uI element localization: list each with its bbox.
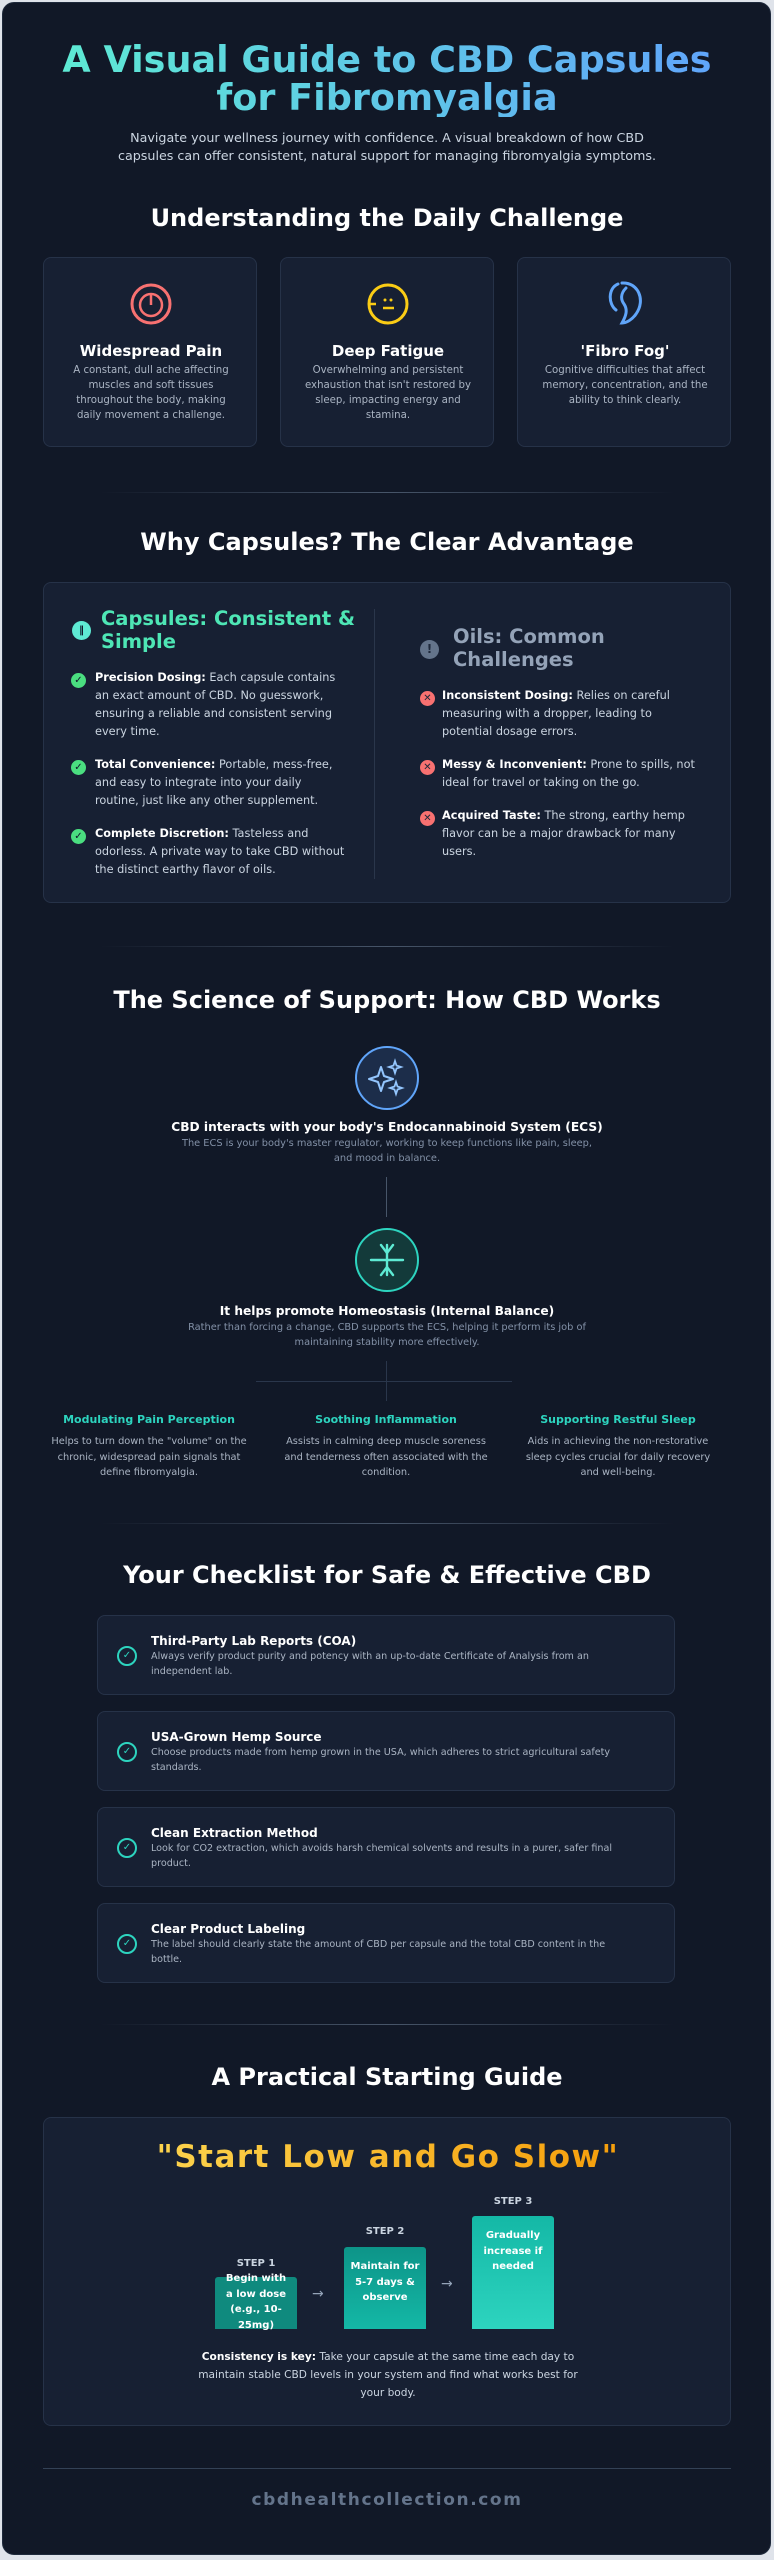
arrow 1: → (312, 2286, 324, 2302)
text: consistency (198, 2351, 578, 2399)
list: oil drawbacks: potential dosage errors. (442, 725, 577, 738)
step 3: needed (492, 2261, 534, 2272)
heading: practical guide: A Practical Starting Guide (211, 2063, 563, 2091)
icon: pain (130, 284, 172, 324)
text: fog: memory, concentration, and the (542, 380, 708, 391)
text: fog (542, 342, 708, 406)
item: messy (420, 760, 435, 775)
text: ECS: The ECS is your body's master regulator, working to keep functions like pain, sleep, (182, 1138, 592, 1149)
icon: check (117, 1838, 137, 1858)
heading: checklist: Your Checklist for Safe & Effective CBD (123, 1561, 651, 1589)
checklist item: extraction: Clean Extraction Method (151, 1826, 318, 1840)
text: homeostasis (188, 1304, 586, 1348)
step 2: 5-7 days & (355, 2276, 415, 2288)
icon: check (117, 1742, 137, 1762)
icon: brain fog (608, 282, 642, 324)
list: capsule benefits: Precision Dosing: Each capsule contains (95, 671, 335, 684)
list: capsule benefits: the distinct earthy flavor of oils. (95, 863, 276, 876)
text: consistency: Consistency is key: Take your capsule at the same time each day to (202, 2351, 574, 2363)
item: taste: ✕ (423, 813, 432, 824)
checklist item: COA: Always verify product purity and potency with an up-to-date Certificate of Analysis from an (151, 1651, 589, 1662)
text: homeostasis: Rather than forcing a change, CBD supports the ECS, helping it perform its job of (188, 1322, 586, 1333)
heading: capsules: Capsules: Consistent & (101, 607, 355, 630)
item: inconsistent (420, 691, 435, 706)
arrow 2: → (441, 2276, 453, 2292)
list: capsule benefits: Total Convenience: Portable, mess-free, (95, 758, 332, 771)
list: capsule benefits: and easy to integrate into your daily (95, 776, 301, 789)
item: inconsistent: ✕ (423, 693, 432, 704)
subtitle (118, 130, 656, 163)
item: convenience: ✓ (74, 762, 83, 773)
list: oil drawbacks: ideal for travel or taking on the go. (442, 776, 640, 789)
column: pain perception: Modulating Pain Perception (63, 1413, 235, 1426)
list: oil drawbacks: measuring with a dropper, leading to (442, 707, 652, 720)
icon: oils warning: ! (427, 642, 432, 656)
item: messy: ✕ (423, 762, 432, 773)
column: pain perception (51, 1413, 247, 1478)
step 3: Gradually (486, 2230, 540, 2241)
column: sleep (526, 1413, 710, 1478)
column: sleep: sleep cycles crucial for daily recovery (526, 1452, 710, 1462)
list: capsule benefits: odorless. A private way to take CBD without (95, 845, 344, 858)
column: pain perception: Helps to turn down the "volume" on the (51, 1436, 247, 1447)
checklist item: labeling: The label should clearly state the amount of CBD per capsule and the total CBD content in the (151, 1939, 605, 1950)
checklist item: extraction: product. (151, 1858, 191, 1869)
text: fog: ability to think clearly. (569, 395, 681, 406)
checklist item: USA hemp: standards. (151, 1762, 202, 1773)
list: capsule benefits: routine, just like any other supplement. (95, 794, 318, 807)
panel: widespread pain (43, 257, 257, 447)
step 2: STEP 2 (366, 2226, 404, 2237)
icon: fatigue face (368, 284, 408, 324)
list: oil drawbacks: Messy & Inconvenient: Prone to spills, not (442, 758, 695, 771)
checklist item: COA: independent lab. (151, 1666, 232, 1677)
icon: check: ✓ (123, 1650, 131, 1661)
panel: start low go slow (43, 2117, 731, 2426)
column: inflammation (284, 1413, 488, 1478)
checklist item: labeling (97, 1903, 675, 1983)
checklist item: COA: Third-Party Lab Reports (COA) (151, 1634, 356, 1648)
list: oil drawbacks: Inconsistent Dosing: Relies on careful (442, 689, 670, 702)
step 2: observe (362, 2292, 408, 2303)
step 3: increase if (484, 2246, 542, 2256)
list: capsule benefits (71, 671, 344, 876)
heading: oils: Oils: Common (453, 625, 605, 648)
heading: capsules (101, 607, 355, 653)
icon: check (117, 1934, 137, 1954)
icon: ECS sparkles (355, 1046, 419, 1110)
column: sleep: Aids in achieving the non-restorative (528, 1436, 708, 1447)
step 2 (344, 2226, 426, 2329)
checklist item: USA hemp (97, 1711, 675, 1791)
list: capsule benefits: ensuring a reliable and consistent serving (95, 707, 332, 720)
subtitle: capsules can offer consistent, natural support for managing fibromyalgia symptoms. (118, 148, 656, 163)
checklist item: labeling: Clear Product Labeling (151, 1922, 305, 1936)
text: fatigue: exhaustion that isn't restored by (305, 380, 471, 391)
step 1 (215, 2258, 297, 2330)
text: ECS: CBD interacts with your body's Endocannabinoid System (ECS) (171, 1120, 603, 1134)
list: oil drawbacks: Acquired Taste: The strong, earthy hemp (442, 809, 685, 822)
icon: check: ✓ (123, 1842, 131, 1853)
text: fatigue: Overwhelming and persistent (313, 365, 463, 376)
title (62, 38, 712, 119)
column: inflammation: and tenderness often associated with the (284, 1452, 488, 1462)
checklist item: labeling: bottle. (151, 1954, 182, 1965)
text: consistency: maintain stable CBD levels in your system and find what works best for (198, 2369, 578, 2381)
text: fatigue: Deep Fatigue (332, 342, 444, 360)
text: fatigue: sleep, impacting energy and (315, 395, 461, 406)
panel: deep fatigue (280, 257, 494, 447)
list: oil drawbacks: users. (442, 845, 476, 858)
item: discretion (71, 829, 86, 844)
title: for Fibromyalgia (216, 76, 558, 119)
heading: science: The Science of Support: How CBD Works (113, 986, 661, 1014)
checklist item: USA hemp: Choose products made from hemp grown in the USA, which adheres to strict agricultural safety (151, 1747, 610, 1758)
text: pain: A constant, dull ache affecting (73, 365, 229, 376)
step 3: STEP 3 (494, 2196, 532, 2207)
column: pain perception: chronic, widespread pain signals that (58, 1452, 240, 1462)
heading: oils: Challenges (453, 648, 574, 671)
item: precision: ✓ (74, 675, 83, 686)
step 1: STEP 1 (237, 2258, 275, 2269)
column: inflammation: Soothing Inflammation (315, 1413, 457, 1426)
checklist item: COA (97, 1615, 675, 1695)
text: fatigue: stamina. (366, 410, 410, 421)
column: sleep: and well-being. (580, 1467, 656, 1478)
text: ECS: and mood in balance. (334, 1153, 440, 1164)
heading: daily challenge: Understanding the Daily Challenge (151, 204, 623, 232)
icon: capsule (72, 621, 91, 640)
column: sleep: Supporting Restful Sleep (540, 1413, 696, 1426)
text: fog: 'Fibro Fog' (581, 342, 669, 360)
icon: check: ✓ (123, 1746, 131, 1757)
item: taste (420, 811, 435, 826)
column: inflammation: condition. (362, 1467, 410, 1478)
footer: cbdhealthcollection.com (251, 2490, 523, 2510)
list: capsule benefits: every time. (95, 725, 160, 738)
list: oil drawbacks: flavor can be a major drawback for many (442, 827, 676, 840)
subtitle: Navigate your wellness journey with confidence. A visual breakdown of how CBD (130, 130, 644, 145)
icon: oils warning (420, 640, 439, 659)
column: pain perception: define fibromyalgia. (100, 1467, 198, 1478)
step 1: (e.g., 10- (230, 2304, 282, 2315)
checklist item: USA hemp: USA-Grown Hemp Source (151, 1730, 322, 1744)
text: fog: Cognitive difficulties that affect (545, 365, 705, 376)
checklist item: extraction: Look for CO2 extraction, which avoids harsh chemical solvents and results in a purer, safer final (151, 1843, 612, 1854)
text: fatigue (305, 342, 471, 421)
list: capsule benefits: Complete Discretion: Tasteless and (95, 827, 308, 840)
text: consistency: your body. (360, 2387, 416, 2399)
icon: check: ✓ (123, 1938, 131, 1949)
text: pain: throughout the body, making (76, 395, 226, 406)
title: A Visual Guide to CBD Capsules (62, 38, 712, 81)
text: pain: daily movement a challenge. (77, 410, 225, 421)
step 3 (472, 2196, 554, 2329)
list: capsule benefits: an exact amount of CBD. No guesswork, (95, 689, 323, 702)
step 1: 25mg) (238, 2320, 274, 2330)
panel: comparison (43, 582, 731, 903)
icon: homeostasis (355, 1228, 419, 1292)
text: homeostasis: maintaining stability more effectively. (295, 1337, 479, 1348)
icon: check (117, 1646, 137, 1666)
step 1: Begin with (226, 2273, 286, 2284)
item: convenience (71, 760, 86, 775)
column: inflammation: Assists in calming deep muscle soreness (286, 1436, 486, 1447)
item: discretion: ✓ (74, 831, 83, 842)
heading: capsules: Simple (101, 630, 176, 653)
text: pain (73, 342, 229, 421)
text: homeostasis: It helps promote Homeostasis (Internal Balance) (220, 1304, 554, 1318)
item: precision (71, 673, 86, 688)
text: ECS (171, 1120, 603, 1164)
step 2: Maintain for (351, 2261, 419, 2272)
slogan: "Start Low and Go Slow" (157, 2139, 619, 2175)
panel: fibro fog (517, 257, 731, 447)
checklist item: extraction (97, 1807, 675, 1887)
step 1: a low dose (226, 2288, 286, 2300)
heading: why capsules: Why Capsules? The Clear Advantage (140, 528, 634, 556)
text: pain: muscles and soft tissues (88, 380, 214, 391)
list: oil drawbacks (420, 689, 695, 858)
text: pain: Widespread Pain (80, 342, 222, 360)
icon: capsule: ‖ (79, 625, 84, 636)
heading: oils (453, 625, 605, 671)
